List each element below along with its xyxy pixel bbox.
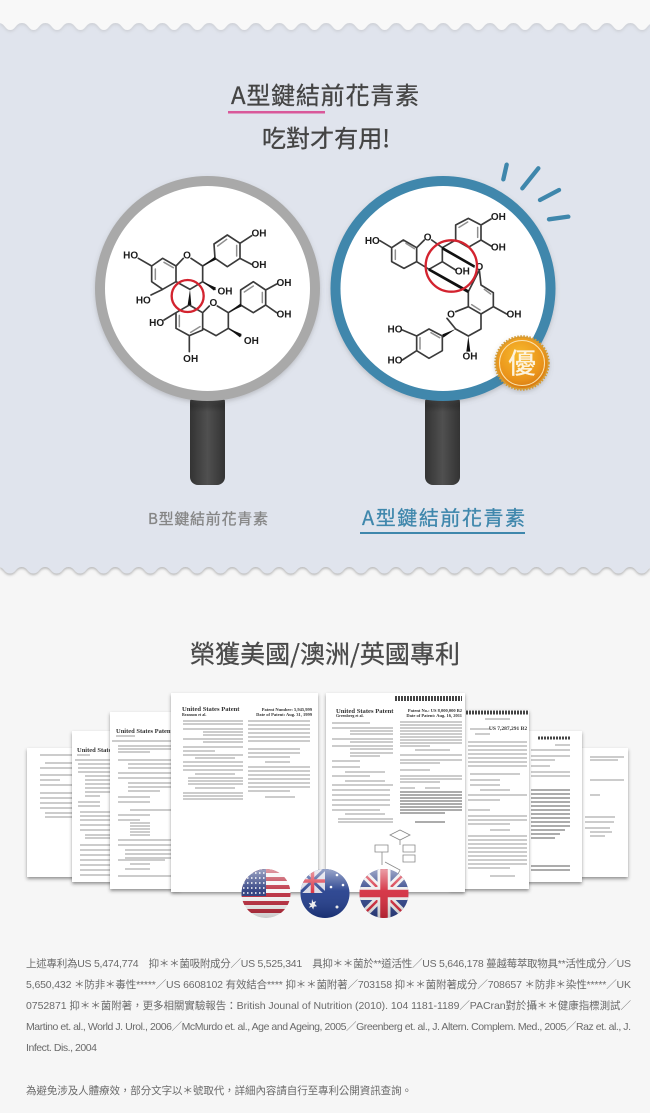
patent sheet 2: [72, 731, 135, 882]
patent documents: [27, 693, 628, 892]
pink heading underline: [228, 111, 325, 114]
molecule: B-type proanthocyanidin: OH: [252, 229, 266, 240]
magnifier handle B: [190, 395, 225, 485]
heading: comparison title: 吃對才有用!: [262, 119, 390, 154]
molecule: B-type proanthocyanidin: O: [209, 298, 217, 309]
magnifier handle A: [425, 395, 460, 485]
patent sheet 5: Greenberg et al.: [336, 713, 364, 718]
molecule: A-type proanthocyanidin: HO: [365, 236, 380, 247]
patent sheet 4: Date of Patent: Aug. 31, 1999: [256, 712, 313, 717]
patent sheet 3: [110, 712, 180, 889]
patent sheet 1: [27, 748, 87, 877]
patent sheet 5: Patent No.: US 8,000,000 B2: [408, 708, 463, 713]
text block: patent references: Infect. Dis., 2004: [26, 1042, 97, 1054]
icon: B-type magnifier: [100, 181, 315, 485]
molecule: B-type proanthocyanidin: OH: [277, 309, 291, 320]
molecule: B-type proanthocyanidin: O: [183, 251, 191, 262]
molecule: A-type proanthocyanidin: OH: [491, 243, 506, 254]
molecule: B-type proanthocyanidin: OH: [218, 286, 232, 297]
label: A type: A型鍵結前花青素: [362, 502, 525, 531]
molecule: A-type proanthocyanidin: O: [447, 309, 455, 320]
molecule: A-type proanthocyanidin: OH: [455, 266, 470, 277]
blue label underline: [360, 532, 525, 534]
text block: patent references: Martino et. al., World J. Urol., 2006／McMurdo et. al., Age and Ageing, 2005／Greenberg et. al., J. Altern. Complem. Med., 2005／Raz et. al., J.: [26, 1021, 631, 1033]
molecule: A-type proanthocyanidin: [365, 212, 521, 366]
patent sheet 4: [171, 693, 318, 892]
molecule: B-type proanthocyanidin: [123, 229, 291, 365]
patent sheet 5: [326, 693, 465, 892]
molecule: B-type proanthocyanidin: OH: [183, 354, 198, 365]
molecule: B-type proanthocyanidin: OH: [252, 260, 266, 271]
patent sheet 5: United States Patent: [336, 708, 394, 715]
patent sheet 5: Date of Patent: Aug. 16, 2011: [406, 713, 463, 718]
icon: USA flag: [241, 869, 291, 919]
text block: patent references: 0752871 抑＊＊菌附著，更多相關實驗報告：British Jounal of Nutrition (2010). 104 1181-1189／PACran對於攝＊＊健康指標測試／: [26, 999, 632, 1012]
molecule: B-type proanthocyanidin: HO: [123, 251, 138, 262]
molecule: A-type proanthocyanidin: O: [475, 262, 483, 273]
text block: disclaimer: 為避免涉及人體療效，部分文字以＊號取代，詳細內容請自行至專利公開資訊查詢。: [26, 1084, 412, 1097]
patent sheet 2: United States Patent: [77, 747, 135, 754]
magnifier lens B: [100, 181, 315, 396]
text block: patent references: [26, 957, 632, 1054]
red highlight circle A: [426, 240, 477, 292]
heading: patents title: 榮獲美國/澳洲/英國專利: [190, 635, 460, 671]
molecule: A-type proanthocyanidin: O: [424, 233, 432, 244]
patent sheet 4: Brannon et al.: [182, 712, 206, 717]
heading: comparison title: [231, 76, 419, 154]
patent sheet 4: Patent Number: 5,945,999: [262, 707, 313, 712]
icon: Australia flag: [300, 869, 350, 919]
magnifier lens A: [336, 181, 550, 396]
icon: gold medal: [496, 336, 548, 390]
top scalloped white band: [0, 0, 650, 40]
molecule: A-type proanthocyanidin: OH: [463, 352, 477, 363]
red highlight circle B: [172, 280, 204, 312]
molecule: A-type proanthocyanidin: HO: [388, 355, 403, 366]
icon: gold medal: 優: [508, 342, 536, 382]
patent sheet 4: United States Patent: [182, 706, 240, 713]
molecule: B-type proanthocyanidin: HO: [149, 318, 164, 329]
icon: blue emphasis ticks: [503, 165, 568, 219]
patent sheet 6: US 7,287,291 B2: [489, 726, 527, 732]
patent sheet 8: [570, 748, 628, 877]
patent sheet 7: [515, 731, 582, 882]
molecule: A-type proanthocyanidin: HO: [388, 324, 403, 335]
patent sheet 3: United States Patent: [116, 728, 174, 735]
panel: upper comparison section background: [0, 0, 650, 580]
molecule: B-type proanthocyanidin: OH: [277, 278, 291, 289]
molecule: B-type proanthocyanidin: OH: [244, 336, 259, 347]
text block: patent references: 上述專利為US 5,474,774 抑＊＊菌吸附成分／US 5,525,341 具抑＊＊菌於**道活性／US 5,646,178 蔓越莓萃取物具**活性成分／US: [26, 957, 631, 970]
text block: patent references: 5,650,432 ＊防非＊毒性*****／US 6608102 有效結合**** 抑＊＊菌附著／703158 抑＊＊菌附著成分／708657 ＊防非＊染性*****／UK: [26, 978, 631, 991]
molecule: B-type proanthocyanidin: HO: [136, 295, 151, 306]
patent sheet 6: [450, 710, 529, 889]
molecule: A-type proanthocyanidin: OH: [491, 212, 506, 223]
heading: comparison title: A型鍵結前花青素: [231, 76, 419, 111]
label: B type: B型鍵結前花青素: [148, 508, 268, 529]
icon: A-type magnifier: [336, 181, 550, 485]
icon: UK flag: [359, 869, 409, 919]
patent flow diagram: [375, 830, 415, 880]
molecule: A-type proanthocyanidin: OH: [507, 309, 521, 320]
